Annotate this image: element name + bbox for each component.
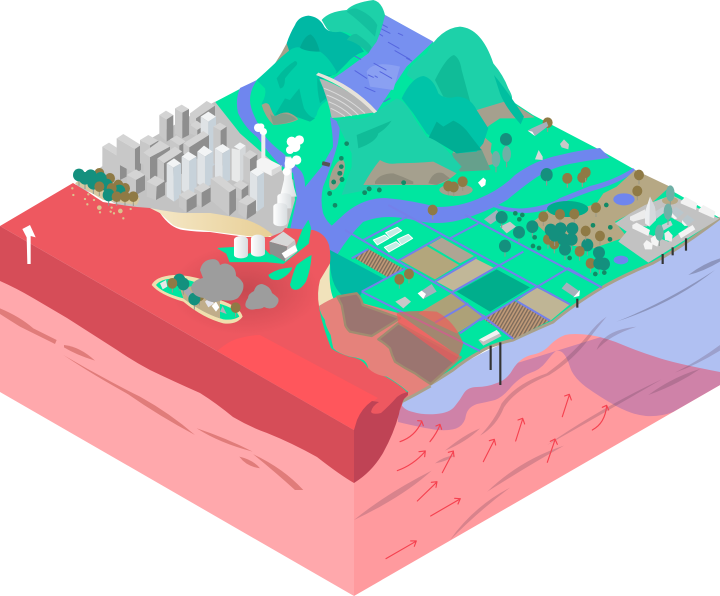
small houses <box>643 240 653 249</box>
island of rock near river <box>326 158 348 192</box>
sea water <box>400 218 720 414</box>
church <box>645 197 656 227</box>
faults on left face <box>0 308 361 490</box>
ripples <box>350 23 412 102</box>
seabed overlap band <box>398 300 720 430</box>
main river <box>325 148 610 262</box>
roofed houses <box>671 207 684 218</box>
flood island <box>152 274 243 324</box>
teal back peak <box>287 16 364 80</box>
red arrows of wave motion <box>386 394 609 559</box>
town green <box>635 213 688 242</box>
city ground <box>73 102 295 237</box>
tree mound <box>662 197 678 205</box>
front peak <box>257 47 337 122</box>
ocean surface with tsunami <box>0 183 407 483</box>
green spill shapes <box>218 221 311 263</box>
pale glass towers <box>167 142 264 212</box>
right cross-section face <box>354 218 720 596</box>
smoke clouds <box>191 259 279 310</box>
farmhouses <box>418 284 437 299</box>
storage tanks <box>277 193 291 208</box>
left cross-section face <box>0 270 361 596</box>
shoreline strip <box>400 218 720 402</box>
flooded fields under the wave <box>318 263 463 404</box>
rivers <box>237 80 636 262</box>
reservoir behind dam <box>333 15 433 112</box>
white steam <box>254 123 304 176</box>
left wave side <box>0 226 354 483</box>
fields and irrigation <box>330 176 602 385</box>
tanks <box>234 236 248 258</box>
small river <box>491 168 636 213</box>
faults on right face <box>354 317 720 540</box>
canals <box>345 205 602 351</box>
stilts <box>663 238 686 264</box>
white tide direction arrow <box>22 225 36 264</box>
greenhouses <box>373 227 413 252</box>
tan meadow <box>533 170 670 248</box>
land surface <box>215 15 720 402</box>
refinery building <box>269 232 295 247</box>
town trees <box>666 185 675 207</box>
long houses back <box>681 197 697 210</box>
city <box>73 101 304 237</box>
woodland houses <box>484 210 502 224</box>
shore under flood <box>400 386 431 403</box>
oil terminal <box>218 221 312 290</box>
rock sliver <box>275 43 290 63</box>
sand beach <box>150 208 273 237</box>
log on river <box>322 161 330 167</box>
town <box>615 185 719 264</box>
coastal grove <box>73 168 140 206</box>
woodland trees <box>327 167 644 276</box>
dam <box>316 73 377 118</box>
paved square <box>615 195 719 263</box>
striped fields <box>355 249 404 278</box>
ponds <box>613 193 635 205</box>
left wing <box>630 209 645 222</box>
back-left mountains <box>257 0 385 125</box>
tall peak <box>407 27 512 110</box>
rock base <box>262 103 298 125</box>
small trees and houses <box>439 184 473 196</box>
middle peak <box>402 76 488 153</box>
woodland meadow <box>327 167 670 276</box>
left river <box>237 80 340 245</box>
front peak <box>337 98 462 195</box>
right mountains <box>327 27 591 196</box>
bright wave crest <box>217 335 378 430</box>
wave end curl <box>354 392 408 483</box>
light top peak <box>322 0 385 53</box>
grey towers front row <box>127 169 256 219</box>
rocky ground <box>447 98 535 172</box>
power plant <box>254 123 304 226</box>
plain fields <box>400 246 459 279</box>
sea surface <box>0 183 407 430</box>
grey towers back row <box>102 101 227 183</box>
shadow under debris <box>170 245 320 335</box>
floating rubble <box>71 187 132 219</box>
stilts <box>491 299 577 385</box>
